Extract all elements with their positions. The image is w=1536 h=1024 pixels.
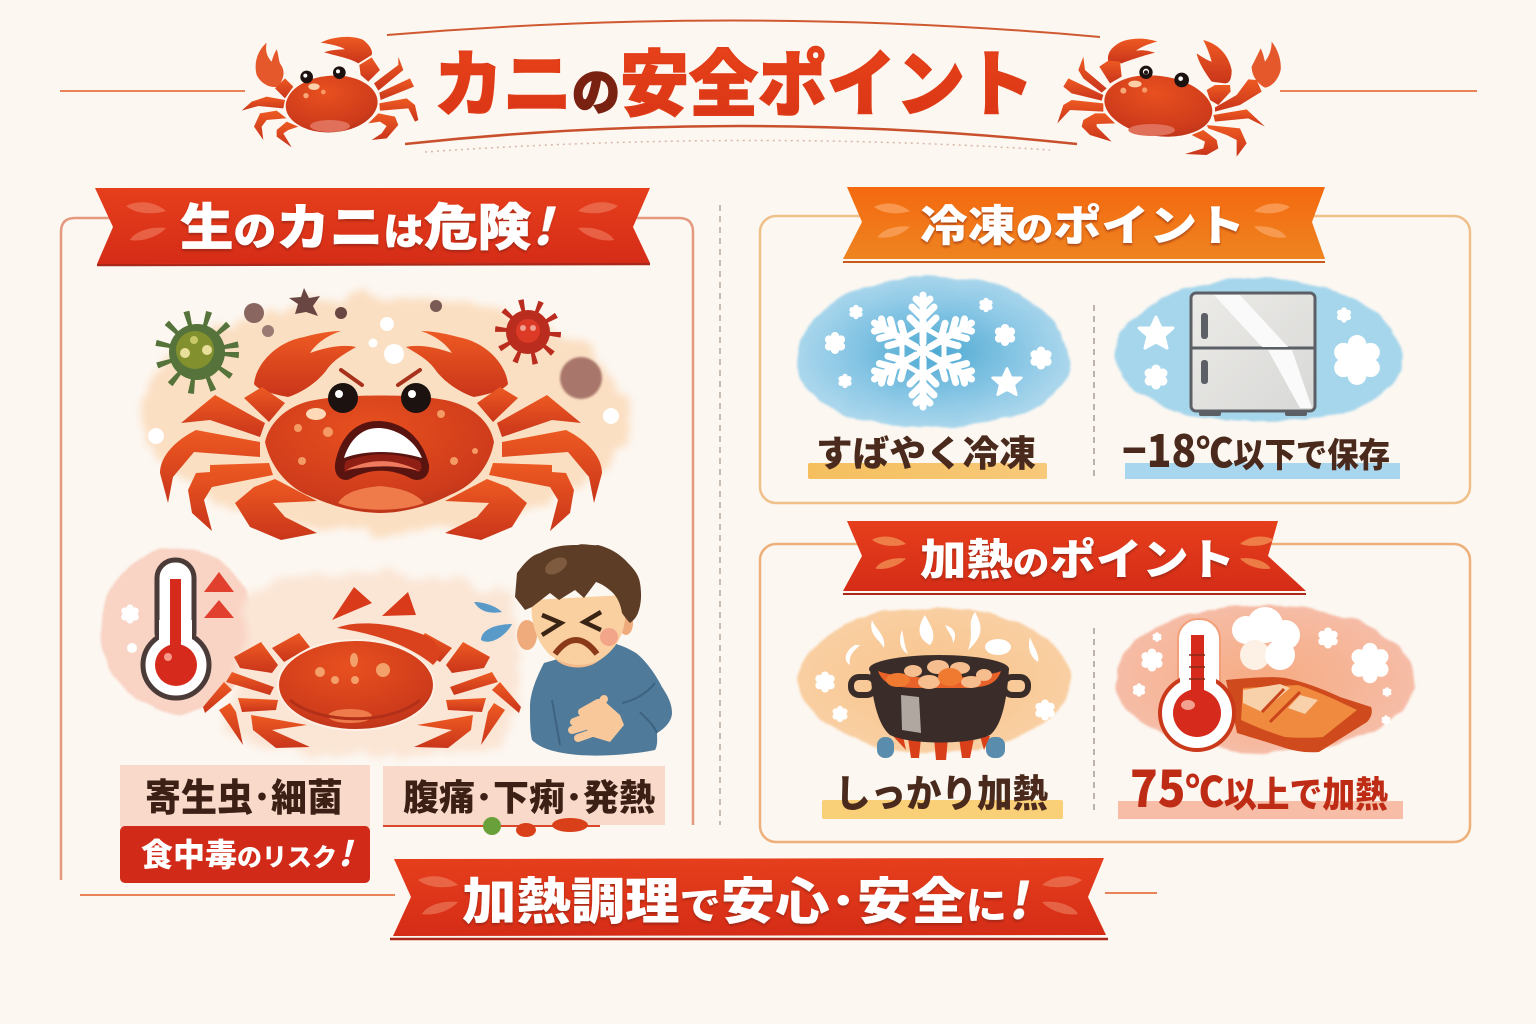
icon: right title crab xyxy=(1057,39,1281,157)
freeze quickly: すばやく冷凍 xyxy=(816,425,1036,477)
icon: left title crab xyxy=(242,37,418,147)
icon: thermometer xyxy=(1160,619,1234,750)
label: symptoms: 腹痛･下痢･発熱 xyxy=(403,769,655,821)
freezing banner: 冷凍 のポイント xyxy=(920,192,1245,254)
icon: freezer xyxy=(1191,293,1315,416)
cook thoroughly: しっかり加熱 xyxy=(835,763,1048,818)
icon: snowflake xyxy=(868,295,978,407)
icon: grilled meat xyxy=(1226,677,1372,752)
panel banner xyxy=(95,187,650,265)
title block xyxy=(60,20,1477,152)
callout: food poisoning risk: ! xyxy=(336,827,361,876)
callout: food poisoning risk: 食中毒のリスク xyxy=(141,830,337,876)
icon: steam cloud xyxy=(1133,607,1391,725)
label: symptoms xyxy=(383,766,665,837)
splash behind crab xyxy=(140,297,630,533)
closing banner: 加熱調理 で安心･安全 に xyxy=(462,862,1007,934)
heat to 75C: 75℃以上で加熱 xyxy=(1130,750,1388,822)
store below -18C: −18℃以下で保存 xyxy=(1122,416,1390,480)
icon: pot on burner xyxy=(851,655,1028,760)
callout: food poisoning risk xyxy=(120,826,370,883)
store below -18C xyxy=(1117,277,1403,480)
heading: カニの安全ポイント xyxy=(434,26,1034,131)
heat to 75C xyxy=(1115,605,1415,822)
spoiled crab xyxy=(203,587,521,748)
thermometer badge xyxy=(101,548,255,712)
center dashed divider xyxy=(719,205,721,825)
freeze quickly xyxy=(797,277,1070,479)
germs and dirt xyxy=(148,288,619,444)
panel banner: 生のカニは危険 xyxy=(180,188,531,260)
panel: heating points xyxy=(760,521,1470,842)
sick person xyxy=(474,544,672,756)
angry crab xyxy=(160,331,602,540)
panel: freezing points xyxy=(760,187,1470,503)
closing banner: ! xyxy=(1005,861,1038,934)
panel banner: ! xyxy=(528,187,566,260)
closing banner xyxy=(80,858,1157,939)
heating banner: 加熱のポイント xyxy=(920,526,1235,588)
splash behind sick crab xyxy=(222,573,519,757)
heating banner xyxy=(843,521,1306,594)
freezing banner xyxy=(843,187,1325,262)
label: parasites and bacteria: 寄生虫･細菌 xyxy=(145,767,343,822)
panel: raw crab danger xyxy=(61,187,693,883)
cook thoroughly xyxy=(799,608,1071,819)
icon: steam xyxy=(815,612,1055,722)
